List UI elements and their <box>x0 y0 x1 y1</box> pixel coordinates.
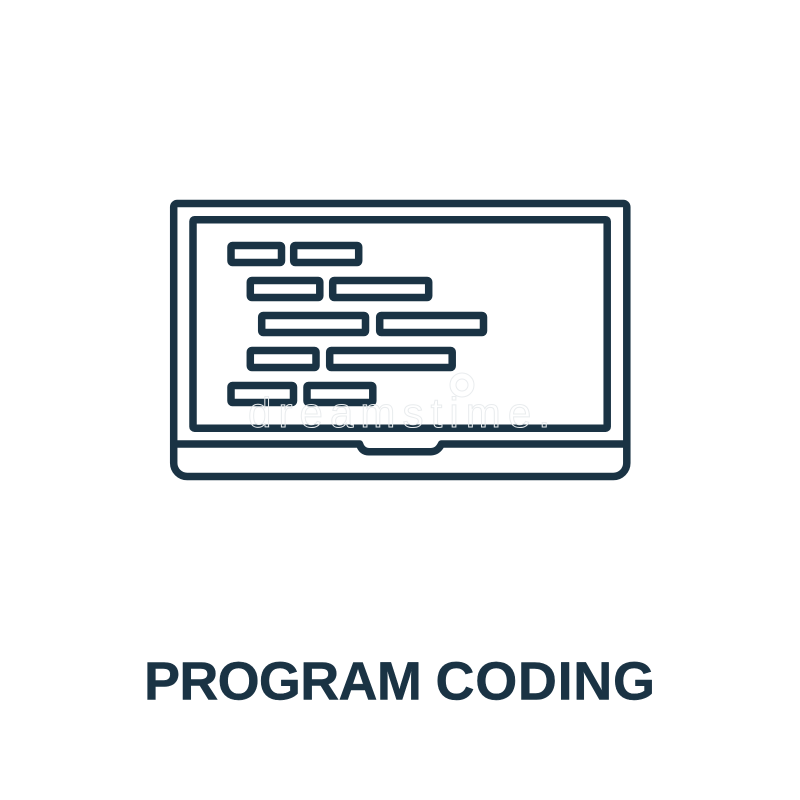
laptop outer body <box>174 204 627 476</box>
code row 2 <box>250 280 429 298</box>
title: CODING <box>436 652 656 712</box>
code lines <box>231 246 484 402</box>
code row 4 <box>250 350 452 368</box>
hinge line with notch <box>174 444 627 452</box>
icon: laptop with code <box>174 204 627 476</box>
watermark: dreamstime. <box>248 389 550 436</box>
laptop screen <box>193 220 607 428</box>
title: PROGRAM <box>144 652 421 712</box>
code row 3 <box>262 316 484 332</box>
code row 1 <box>231 246 359 262</box>
code row 5 <box>231 386 373 402</box>
